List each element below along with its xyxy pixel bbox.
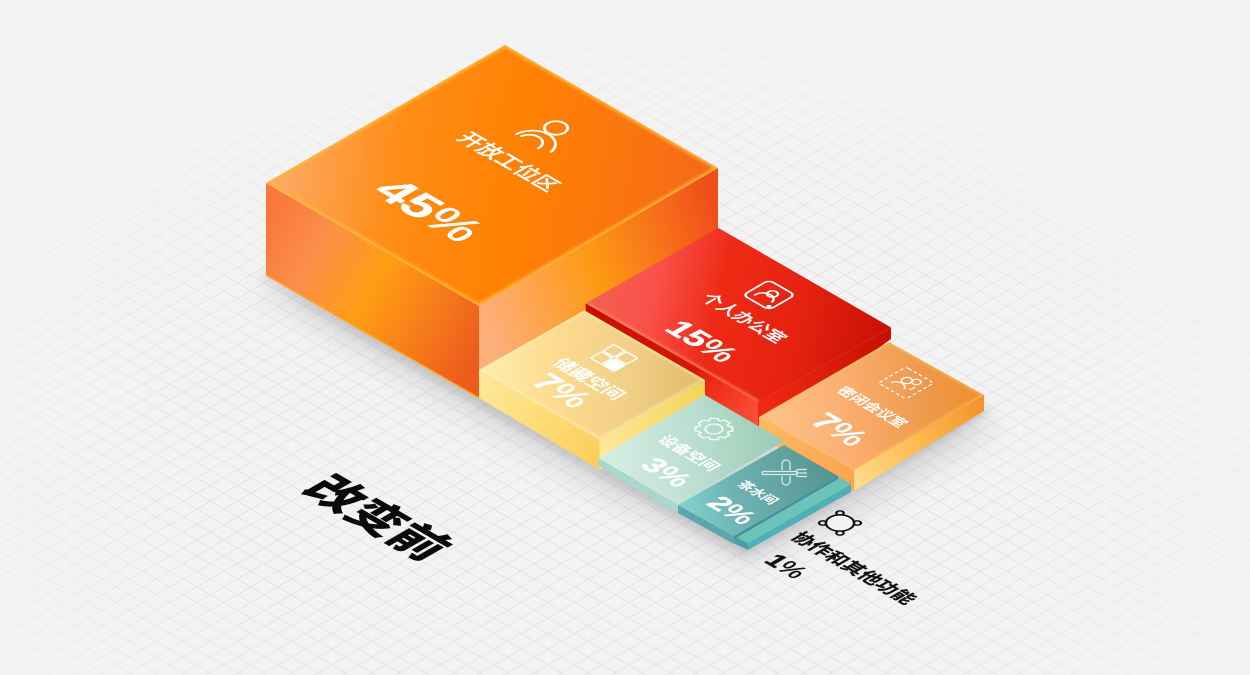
icon: knife and fork (762, 460, 807, 485)
icon: four squares (591, 344, 637, 372)
floor shadow (250, 272, 1000, 565)
title: before the change: 改变前 (291, 470, 461, 568)
value: 45%: 45% (362, 172, 495, 249)
icon: gear (688, 414, 740, 444)
slab top face (678, 445, 838, 536)
value: 1%: 1% (758, 550, 813, 583)
block: equipment 3% (598, 395, 784, 514)
icon: person (515, 115, 582, 154)
label: storage: 储藏空间 (548, 355, 630, 403)
label: private office: 个人办公室 (696, 291, 791, 346)
value: 3%: 3% (633, 453, 699, 491)
slab sides (479, 370, 705, 470)
value: 2%: 2% (699, 492, 763, 529)
label: collaboration and other: 协作和其他功能 (785, 529, 921, 608)
isometric floor grid (50, 104, 1150, 675)
slab sides (598, 458, 678, 514)
icon: user frame (743, 280, 795, 310)
block: collaboration strip 1% (734, 476, 851, 550)
slab sides (586, 303, 891, 436)
value: 15%: 15% (657, 316, 746, 367)
slab top face (759, 342, 984, 470)
block: private office 15% (586, 228, 891, 436)
icon: round table (817, 510, 863, 536)
slab sides (759, 395, 984, 491)
slab top face (598, 395, 784, 505)
label: open workspace: 开放工位区 (451, 129, 565, 195)
block: pantry 2% (678, 445, 838, 544)
slab top face (479, 310, 705, 440)
slab sides (678, 476, 838, 544)
block sides (266, 168, 718, 398)
block top face (266, 45, 718, 306)
block: open workspace 45% (266, 45, 718, 398)
label: equipment: 设备空间 (653, 433, 724, 474)
icon: dashed frame people (878, 367, 934, 399)
label: pantry: 茶水间 (734, 479, 782, 506)
label: meeting room: 密闭会议室 (832, 384, 912, 430)
slab top face (586, 228, 891, 402)
value: 7%: 7% (802, 408, 876, 451)
value: 7%: 7% (522, 369, 599, 413)
block: meeting room 7% (759, 342, 984, 491)
block: storage 7% (479, 310, 705, 470)
